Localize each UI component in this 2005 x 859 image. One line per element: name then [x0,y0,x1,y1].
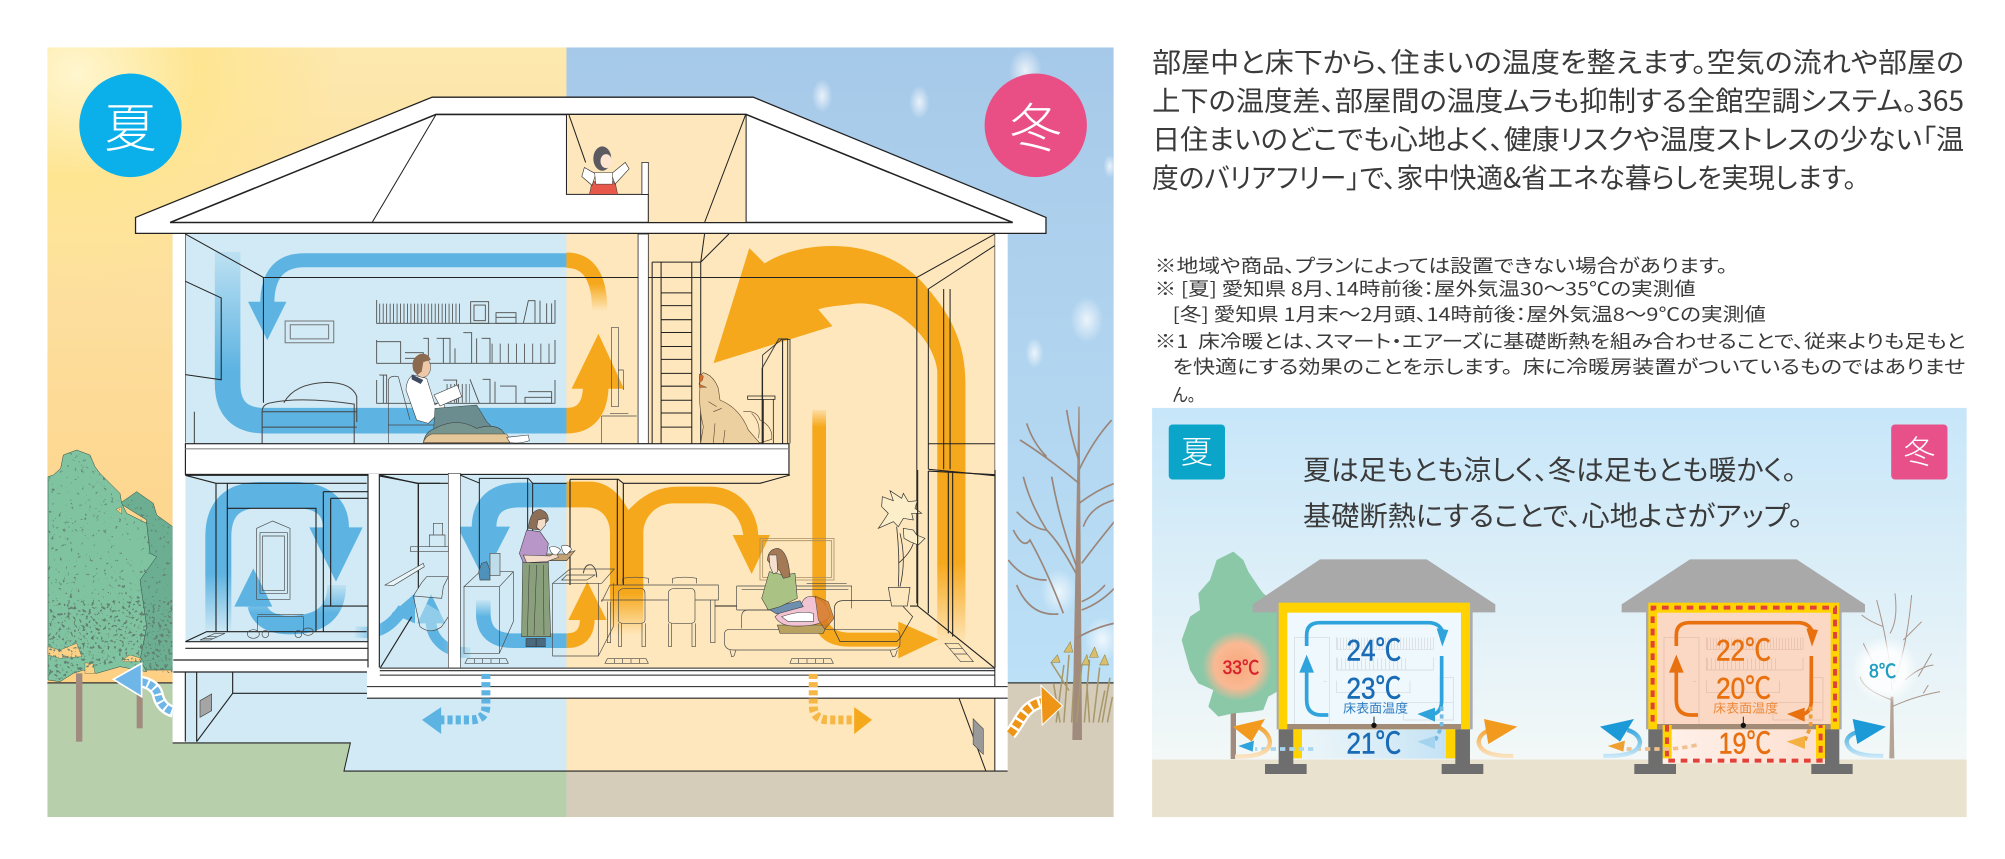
television [602,327,637,443]
air flow arrows: bathroom [218,495,415,632]
armchair [834,601,913,642]
sky and ground [1152,408,1967,760]
plant [878,491,925,606]
intro paragraph: 部屋中と床下から、住まいの温度を整えます。空気の流れや部屋の [1152,40,1964,80]
dried grass [1051,642,1112,722]
sitting dog [699,373,760,443]
intro paragraph: 度のバリアフリー」で、家中快適&省エネな暮らしを実現します。 [1152,155,1857,195]
outside air arrows [1603,730,1883,756]
crawl vent [200,694,212,717]
ladder wall and right wall [652,234,729,444]
attic room [566,114,746,223]
air flow arrows: toilet and kitchen, summer side [417,482,770,653]
wall outer left [173,234,185,743]
floor vents [465,659,648,663]
red insulation dashes [1653,608,1835,761]
bare winter tree [1008,407,1114,740]
footnotes: ※ [夏] 愛知県 8月、14時前後：屋外気温30～35℃の実測値 [1155,274,1696,301]
ghost furniture [1664,637,1823,724]
label: winter: 冬 [1903,427,1935,473]
air flow arrows: kitchen and living, winter side [567,482,758,635]
tub door [200,521,313,640]
wall [448,473,460,668]
snow flakes [812,49,1120,662]
wall [1646,604,1842,729]
sofa [724,610,900,657]
temperatures: 22℃ [1716,635,1771,668]
sitting woman [762,548,803,614]
console [737,583,852,610]
crawl space and interior: summer side [173,234,566,771]
outside air arrows [1235,727,1513,757]
footnotes: ※地域や商品、プランによっては設置できない場合があります。 [1155,251,1728,278]
ground: summer [47,683,566,817]
circulation arrows [1627,623,1813,749]
counter [464,553,513,653]
panel: foundation insulation comparison [1152,408,1967,817]
footnotes: [冬] 愛知県 1月末～2月頭、14時前後：屋外気温8～9℃の実測値 [1173,300,1766,327]
second-floor room line work [185,234,995,604]
tree [1182,552,1280,759]
living room: TV, sofa, woman and plant [724,470,995,668]
wall [368,474,379,687]
wall [1277,604,1473,729]
panel: house cross-section [47,47,1120,817]
comparison heading: 基礎断熱にすることで、心地よさがアップ。 [1303,494,1803,534]
label: summer: 夏 [1181,427,1213,473]
heat glow [1202,631,1272,701]
dashed arrow: outside winter [1010,685,1063,734]
reader [406,354,493,435]
footnotes: を快適にする効果のことを示します。 床に冷暖房装置がついているものではありませ [1173,352,1965,379]
cold glow: 8℃ [1869,661,1896,682]
winter house diagram [1600,559,1940,774]
air flow arrows: winter, second floor [566,246,965,646]
lines [380,475,790,585]
intro paragraph [1152,40,1964,195]
intro paragraph: 日住まいのどこでも心地よく、健康リスクや温度ストレスの少ない「温 [1152,117,1964,157]
dashed arrow: crawl space summer [422,674,486,734]
winter house diagram: 床表面温度 [1713,698,1778,716]
comparison heading [1303,448,1803,534]
air flow arrow: living room to floor [812,410,938,658]
tree [1860,593,1940,758]
girl in attic [582,146,629,194]
footnotes: ※1 床冷暖とは、スマート・エアーズに基礎断熱を組み合わせることで、従来よりも足もと [1155,327,1965,354]
comparison heading: 夏は足もとも涼しく、冬は足もとも暖かく。 [1303,448,1797,488]
roof [1253,559,1495,612]
badge: winter: 冬 [1010,86,1062,162]
label: winter [1891,425,1947,480]
crawl space [1293,729,1455,759]
badge: summer [79,74,182,177]
summer house diagram: 21℃ [1346,727,1401,760]
footnotes: ん。 [1173,381,1196,408]
roof [136,97,1046,233]
summer house diagram [1182,552,1517,774]
right wall lines [910,470,995,668]
heat glow: 33℃ [1223,658,1259,679]
cushion and basket [775,596,834,633]
sky gaps in foliage [48,507,142,673]
sleeping dog [423,423,512,443]
toilet room fittings [385,523,448,631]
label: summer [1169,425,1225,480]
bookshelves [377,300,555,403]
dashed arrow: outside summer [113,663,173,712]
toilet, counter, standing woman, kitchen and dining [380,473,790,668]
footnotes [1155,251,1965,408]
bed [194,382,357,444]
dining table and chairs [602,577,737,647]
floor vents [790,643,973,663]
crawl space [1663,729,1825,763]
roof [1622,559,1865,612]
badge: winter [985,74,1087,177]
kitchen counter [553,565,614,656]
second floor slab [185,444,789,474]
background: winter sky [566,47,1114,684]
cat tower [748,339,790,443]
probe [1372,717,1375,725]
temperatures: 24℃ [1346,635,1401,668]
TV [760,538,834,580]
badge: summer: 夏 [104,86,157,162]
winter house diagram: 19℃ [1719,727,1771,760]
circulation arrows [1255,623,1443,749]
standing woman [519,509,575,647]
winter house diagram: 20℃ [1716,673,1771,706]
foliage specks [48,450,175,683]
summer house diagram: 床表面温度 [1343,698,1408,716]
ground: winter [566,683,1114,817]
ghost furniture [1294,637,1453,724]
cold glow [1852,637,1918,703]
wall outer right [995,234,1008,771]
foundations [1265,729,1307,774]
first floor slab [367,667,1008,698]
air flow arrows: summer, second floor [228,252,566,421]
house shell [173,234,1008,771]
floor band [186,642,368,672]
dashed arrow: crawl space winter [813,674,872,734]
summer house diagram: 23℃ [1346,673,1401,706]
sun glow [47,47,298,236]
probe [1742,717,1745,725]
bookshelves and man reading [377,300,790,443]
chair [388,376,435,443]
background: summer sky [47,47,566,684]
crawl space right line work [959,698,995,771]
summer trees [48,450,175,742]
intro paragraph: 上下の温度差、部屋間の温度ムラも抑制する全館空調システム。365 [1152,79,1964,119]
bathroom walls and fixtures [173,474,440,742]
interior: winter side [566,234,1008,771]
foundations [1634,729,1676,774]
